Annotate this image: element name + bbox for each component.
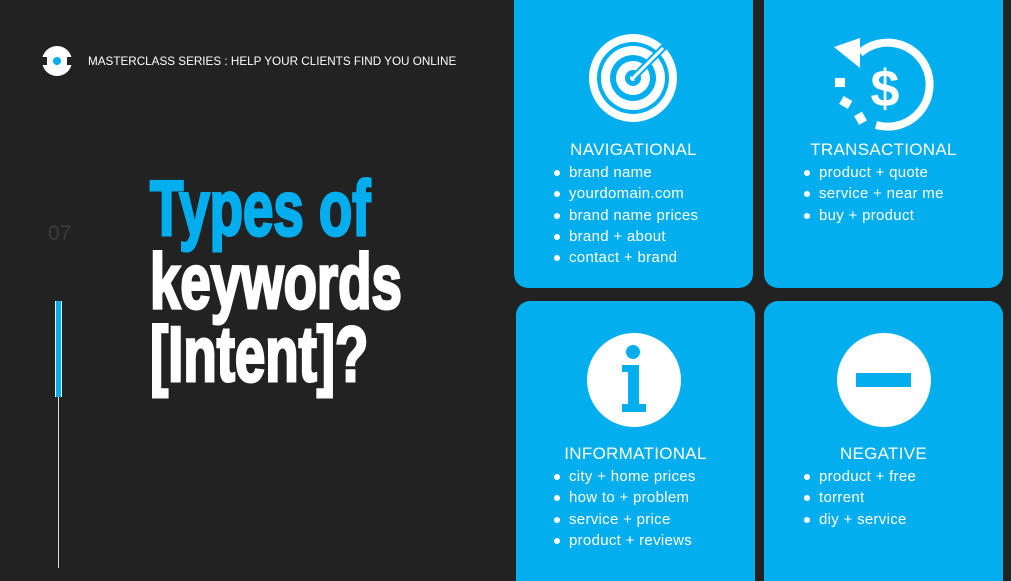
list: contact + brand xyxy=(569,249,677,266)
list: yourdomain.com xyxy=(569,185,684,202)
list xyxy=(554,468,696,549)
heading: INFORMATIONAL xyxy=(564,444,707,463)
title: Types of xyxy=(150,164,370,252)
panel: informational xyxy=(516,301,755,581)
progress bar xyxy=(55,301,62,568)
icon: radar xyxy=(589,34,677,122)
slide number: 07 xyxy=(48,222,71,245)
icon: dollar cycle: $ xyxy=(871,60,900,118)
title: keywords xyxy=(150,237,402,325)
list: brand name xyxy=(569,164,652,181)
list: city + home prices xyxy=(569,468,696,485)
list: service + near me xyxy=(819,185,944,202)
list: torrent xyxy=(819,489,864,506)
list: brand name prices xyxy=(569,207,698,224)
list: product + free xyxy=(819,468,916,485)
panel: navigational xyxy=(514,0,753,288)
logo icon xyxy=(42,46,72,76)
list: brand + about xyxy=(569,228,666,245)
list: how to + problem xyxy=(569,489,689,506)
list: product + reviews xyxy=(569,532,692,549)
list: product + quote xyxy=(819,164,928,181)
list: buy + product xyxy=(819,207,914,224)
header text: MASTERCLASS SERIES : HELP YOUR CLIENTS FIND YOU ONLINE xyxy=(88,55,456,68)
list xyxy=(554,164,698,266)
title xyxy=(150,164,402,398)
icon: dollar cycle xyxy=(834,38,934,131)
heading: TRANSACTIONAL xyxy=(810,140,957,159)
panel: transactional xyxy=(764,0,1003,288)
panel: negative xyxy=(764,301,1003,581)
heading: NAVIGATIONAL xyxy=(570,140,697,159)
heading: NEGATIVE xyxy=(840,444,927,463)
icon: minus xyxy=(837,333,931,427)
icon: info xyxy=(587,333,681,427)
list xyxy=(804,468,916,528)
title: [Intent]? xyxy=(150,310,368,398)
list: service + price xyxy=(569,511,671,528)
list: diy + service xyxy=(819,511,907,528)
list xyxy=(804,164,944,224)
